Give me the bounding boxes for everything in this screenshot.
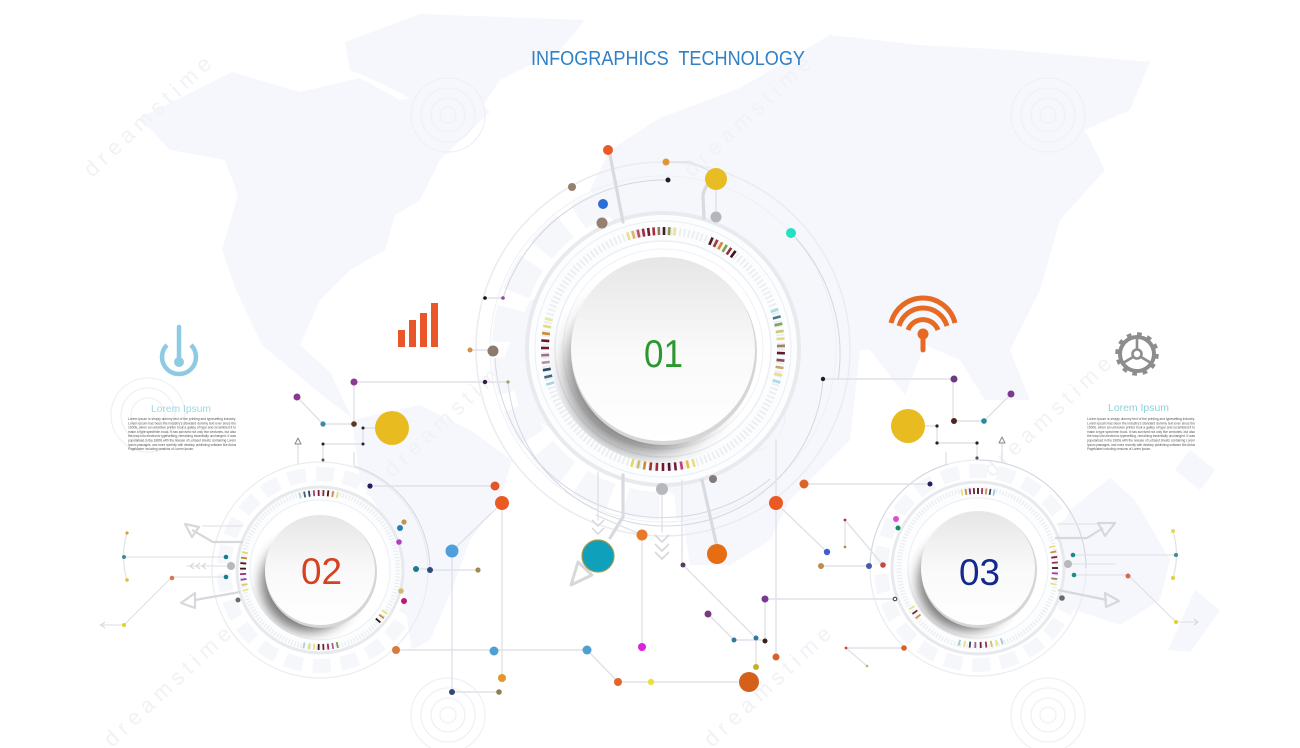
icon: power: [162, 327, 196, 374]
text block: left: Ipsum passages, and more recently with desktop publishing software like Aldus: [128, 443, 236, 447]
text block: left: make a type specimen book. It has survived not only five centuries, but also: [128, 430, 236, 434]
watermark: dreamstime: [698, 621, 836, 748]
text block: left: 1500s, when an unknown printer took a galley of type and scrambled it to: [128, 426, 236, 430]
text block: left: [128, 403, 236, 451]
text block: left: Lorem Ipsum is simply dummy text of the printing and typesetting industry.: [128, 417, 236, 421]
icon: gear: [1118, 334, 1156, 374]
colored ticks 03: [909, 488, 1058, 648]
colored ticks 01: [541, 227, 785, 471]
text block: right: Ipsum passages, and more recently with desktop publishing software like Aldus: [1087, 443, 1195, 447]
text block: right: Lorem Ipsum: [1108, 402, 1169, 414]
circle 03: [870, 460, 1086, 676]
text block: left: Lorem Ipsum: [151, 403, 211, 415]
watermark: dreamstime: [98, 621, 236, 748]
node dots: [122, 145, 1178, 695]
colored ticks 02: [240, 490, 388, 650]
watermark: dreamstime: [678, 51, 816, 182]
number 02: 02: [301, 551, 342, 592]
text block: right: [1087, 402, 1195, 451]
title: INFOGRAPHICS TECHNOLOGY: [531, 48, 805, 70]
background world map: [140, 14, 1220, 652]
shadow of disc 02: [261, 536, 357, 632]
arrows: [101, 437, 1198, 628]
disc 01: [571, 257, 757, 445]
text block: right: PageMaker including versions of Lorem Ipsum.: [1087, 447, 1151, 451]
icon: bar chart: [398, 303, 438, 347]
watermark: dreamstime: [78, 51, 216, 182]
text block: right: the leap into electronic typesetting, remaining essentially unchanged. It was: [1087, 434, 1195, 438]
text block: left: PageMaker including versions of Lorem Ipsum.: [128, 447, 194, 451]
watermark: [78, 51, 1116, 748]
number 03: 03: [959, 552, 1000, 593]
text block: right: 1500s, when an unknown printer took a galley of type and scrambled it to: [1087, 426, 1195, 430]
watermark: dreamstime: [378, 351, 516, 482]
text block: right: Lorem Ipsum has been the industry's standard dummy text ever since the: [1087, 421, 1195, 425]
text block: left: the leap into electronic typesetting, remaining essentially unchanged. It was: [128, 434, 236, 438]
text block: left: popularised in the 1960s with the release of Letraset sheets containing Lorem: [128, 438, 236, 442]
number 01: 01: [644, 333, 683, 376]
text block: left: Lorem Ipsum has been the industry's standard dummy text ever since the: [128, 421, 236, 425]
text block: right: make a type specimen book. It has survived not only five centuries, but also: [1087, 430, 1195, 434]
disc 02: [265, 515, 377, 628]
circle 02: [212, 462, 430, 678]
text block: right: Lorem Ipsum is simply dummy text of the printing and typesetting industry.: [1087, 417, 1195, 421]
icon: wifi: [891, 298, 955, 350]
shadow of disc 01: [567, 292, 727, 452]
connector lines: [100, 155, 1198, 692]
text block: right: popularised in the 1960s with the release of Letraset sheets containing Lorem: [1087, 438, 1195, 442]
watermark: dreamstime: [978, 351, 1116, 482]
disc 03: [921, 511, 1037, 628]
shadow of disc 03: [918, 533, 1016, 631]
circle 01: [476, 162, 850, 536]
